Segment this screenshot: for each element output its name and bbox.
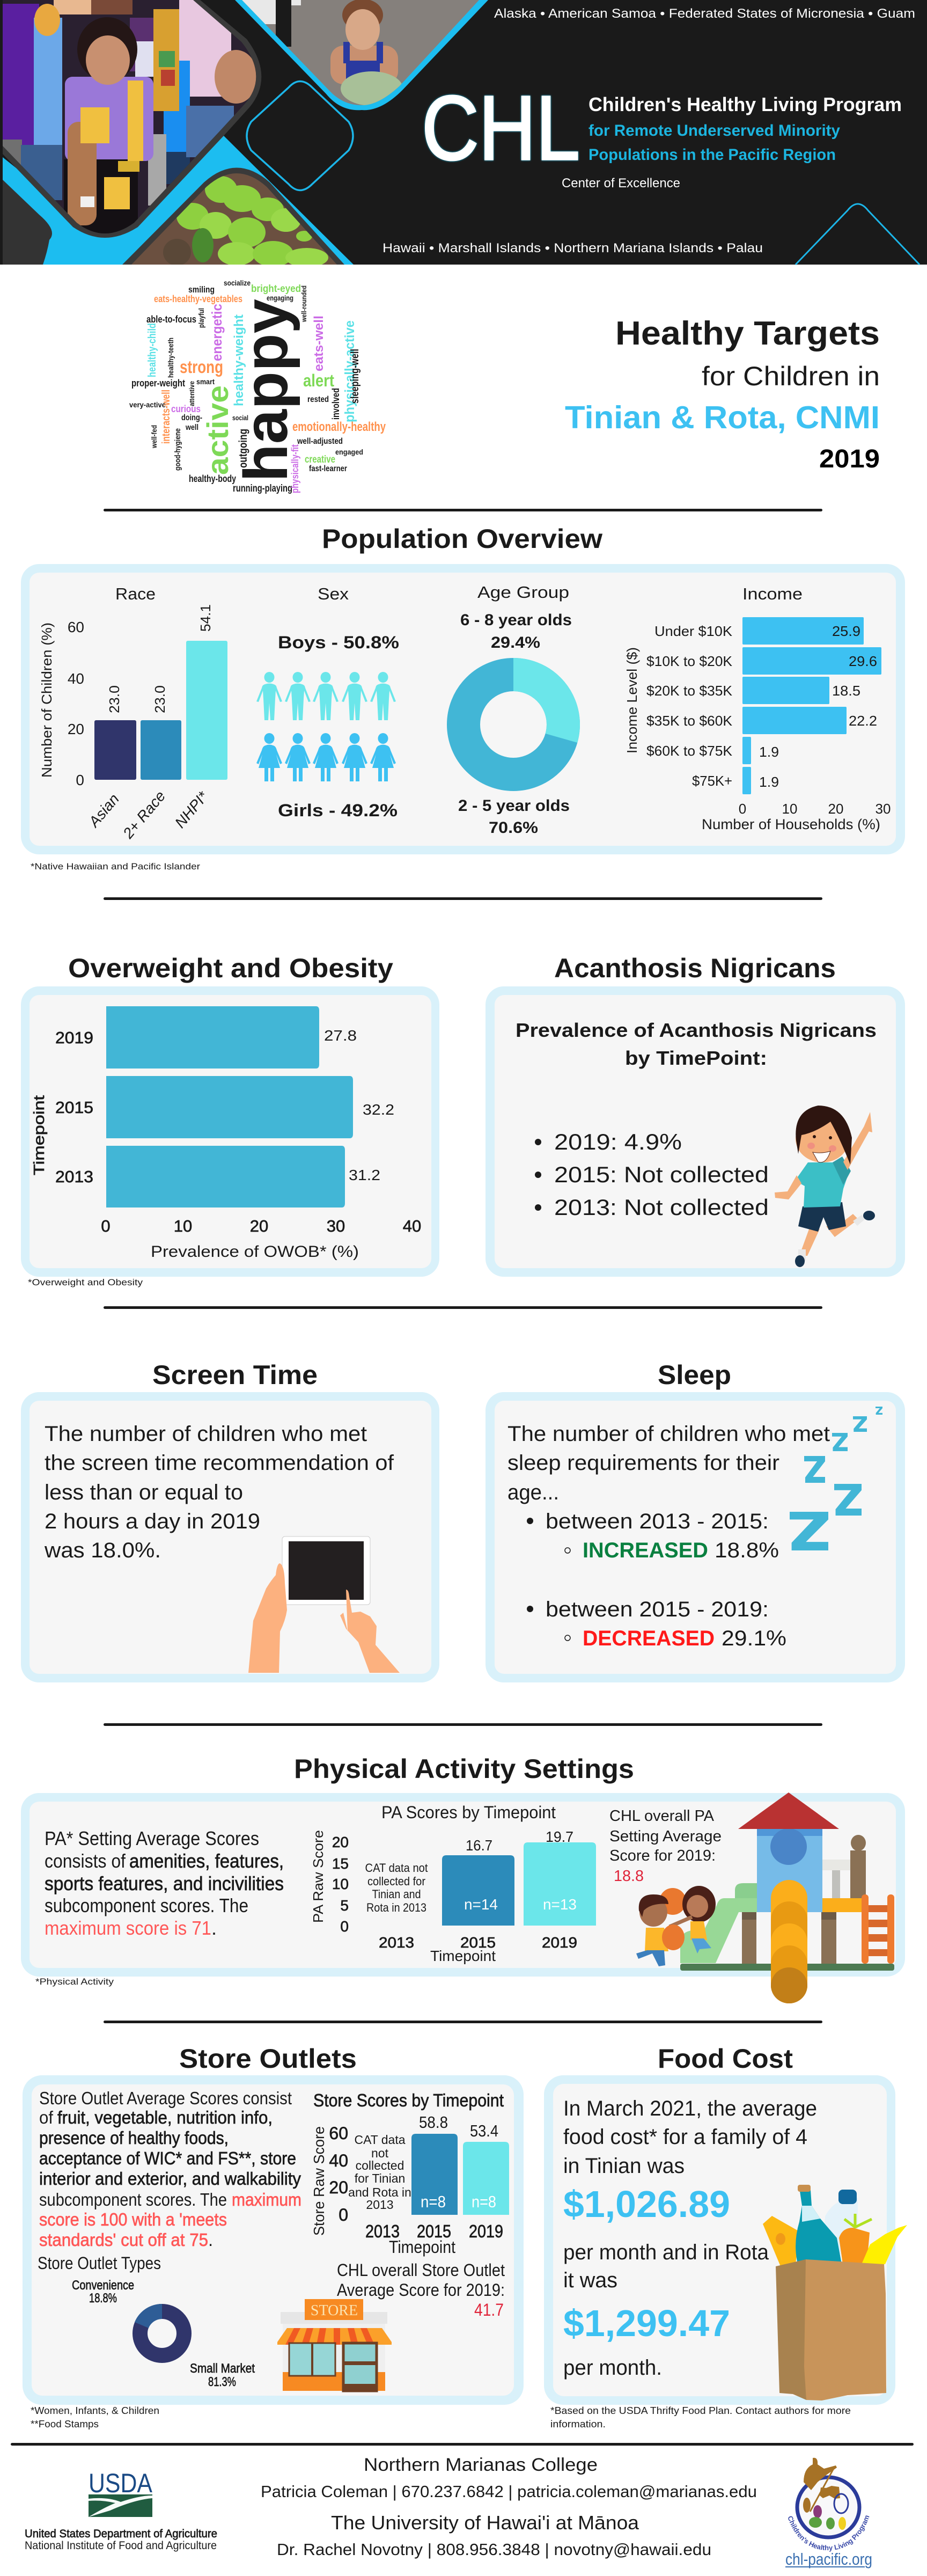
word cloud: involved — [330, 388, 341, 420]
chart: race: 23.0 — [152, 685, 168, 713]
bar chart: PA scores by timepoint: Timepoint — [430, 1948, 496, 1964]
bar chart: PA scores by timepoint: PA Scores by Timepoint — [381, 1803, 556, 1822]
bar chart: PA scores by timepoint — [310, 1803, 596, 1964]
text: store outlet description: interior and exterior, and walkability — [39, 2169, 301, 2189]
panel: store outlets — [23, 2075, 524, 2405]
word cloud: engaged — [335, 448, 363, 456]
heading: store outlets: Store Outlets — [179, 2044, 357, 2074]
link: chl-pacific.org: chl-pacific.org — [785, 2550, 872, 2568]
bar chart: income: $20K to $35K — [646, 683, 733, 699]
panel: physical activity settings — [21, 1792, 905, 2003]
text: screen time recommendation — [44, 1422, 394, 1562]
title year: 2019 — [819, 445, 880, 473]
bar chart: PA scores by timepoint: 2013 — [379, 1934, 414, 1951]
panel: sleep — [485, 1392, 905, 1682]
bar chart: income: $75K+ — [692, 773, 732, 789]
bar chart: income: 1.9 — [759, 774, 779, 790]
text: store outlet description: standards' cut off at 75 — [39, 2230, 208, 2250]
footnote: food cost: information. — [550, 2419, 606, 2429]
text: store outlet description: maximum — [232, 2190, 301, 2209]
word cloud: strong — [180, 357, 223, 377]
text: store outlet description: fruit, vegetable, nutrition info, — [57, 2107, 273, 2127]
program name: Children's Healthy Living Program — [588, 93, 902, 115]
word cloud: able-to-focus — [146, 314, 196, 325]
text: store outlet description: . — [208, 2230, 213, 2250]
heading: physical activity settings: Physical Activity Settings — [294, 1754, 634, 1784]
text: food cost intro — [563, 2097, 817, 2178]
bar chart: store scores by timepoint: for Tinian — [355, 2171, 405, 2185]
text: PA description: maximum score is 71 — [45, 1917, 211, 1939]
callout: CHL overall PA score: Score for 2019: — [609, 1847, 716, 1864]
text: sleep requirements: The number of children who met — [507, 1422, 830, 1446]
text: food cost middle: per month and in Rota — [563, 2241, 769, 2264]
bar chart: store scores by timepoint: 0 — [339, 2205, 348, 2224]
word cloud: well-fed — [150, 425, 158, 449]
heading: acanthosis nigricans: Acanthosis Nigricans — [554, 953, 836, 983]
word cloud: sleeping-well — [349, 349, 361, 404]
bar chart: PA scores by timepoint: n=13 — [543, 1896, 577, 1913]
heading: food cost: Food Cost — [658, 2044, 793, 2074]
word cloud: doing- — [181, 413, 202, 422]
bar chart: income: 18.5 — [832, 683, 860, 699]
footnotes: store outlets: **Food Stamps — [31, 2419, 99, 2429]
word cloud: running-playing — [233, 483, 292, 494]
bar chart: store scores by timepoint: 2015 — [417, 2221, 451, 2241]
text: PA description: subcomponent scores. The — [45, 1894, 248, 1916]
heading: population overview: Population Overview — [322, 524, 602, 554]
word cloud: good-hygiene — [173, 428, 182, 471]
bar chart: income: $10K to $20K — [646, 653, 733, 669]
footnotes: store outlets: *Women, Infants, & Children — [31, 2405, 159, 2416]
chart: race: 40 — [68, 670, 84, 687]
donut chart: store outlet types: Small Market — [190, 2361, 255, 2376]
text: food cost middle — [563, 2241, 769, 2292]
icon: storefront — [277, 2299, 392, 2391]
text: store outlet description: score is 100 with a 'meets — [39, 2209, 227, 2229]
bar chart: income: 10 — [782, 801, 797, 817]
bullet list: AN values: 2019: 4.9% — [554, 1129, 682, 1154]
text: screen time recommendation: less than or equal to — [45, 1481, 243, 1504]
text: screen time recommendation: 2 hours a day in 2019 — [45, 1510, 260, 1533]
bar chart: OWOB prevalence: 2013 — [55, 1167, 93, 1186]
icon: children with basketballs — [636, 1886, 716, 1966]
text: sleep requirements: between 2013 - 2015: — [546, 1510, 769, 1533]
bar chart: OWOB prevalence: 20 — [250, 1217, 268, 1235]
word cloud: alert — [303, 371, 334, 390]
text: food cost intro: In March 2021, the average — [563, 2097, 817, 2120]
program tagline line 1: for Remote Underserved Minority — [588, 122, 840, 140]
icon: hands holding tablet — [248, 1536, 400, 1673]
text: sleep requirements — [507, 1422, 830, 1650]
word cloud: attentive — [188, 381, 196, 406]
text: sleep requirements: DECREASED — [583, 1627, 715, 1650]
bar chart: income: Income Level ($) — [624, 647, 640, 753]
text: screen time recommendation: was 18.0%. — [44, 1539, 161, 1562]
bar chart: OWOB prevalence: 32.2 — [363, 1101, 394, 1118]
donut chart: age group — [458, 583, 580, 837]
bar chart: OWOB prevalence: Timepoint — [31, 1095, 47, 1175]
bar chart: PA scores by timepoint: 19.7 — [546, 1828, 573, 1845]
chart: race: 2+ Race — [119, 788, 168, 842]
bar chart: store scores by timepoint: 58.8 — [419, 2113, 448, 2132]
footnotes: store outlets — [31, 2405, 159, 2429]
bar chart: store scores by timepoint: n=8 — [472, 2192, 496, 2211]
contact block: The University of Hawai'i at Mānoa — [331, 2512, 639, 2534]
text: store outlet description: of — [39, 2107, 54, 2127]
word cloud: well-adjusted — [297, 437, 343, 446]
text: sleep requirements: age... — [507, 1481, 559, 1504]
word cloud: physically-fit — [290, 444, 300, 493]
icon: grocery bag — [763, 2185, 907, 2401]
logo: USDA: National Institute of Food and Agriculture — [25, 2540, 217, 2552]
bar chart: OWOB prevalence — [31, 1006, 421, 1261]
pictogram: sex: Girls - 49.2% — [278, 801, 398, 820]
figure: Rota cost: $1,299.47 — [563, 2302, 730, 2344]
bar chart: OWOB prevalence: 2019 — [55, 1028, 93, 1047]
word cloud: eats-healthy-vegetables — [154, 294, 242, 304]
bar chart: store scores by timepoint: 40 — [329, 2151, 348, 2170]
word cloud: socialize — [224, 279, 251, 287]
bar chart: store scores by timepoint: 20 — [329, 2178, 348, 2197]
bar chart: store scores by timepoint — [311, 2090, 509, 2257]
bar chart: income: $35K to $60K — [646, 713, 733, 729]
text: PA description: amenities, features, — [129, 1850, 284, 1872]
CHL logotype: CHL — [422, 77, 580, 179]
text: sleep requirements: INCREASED — [583, 1539, 708, 1562]
text: per month: per month. — [563, 2356, 662, 2380]
text: sleep requirements: 29.1% — [722, 1627, 786, 1650]
photo: smiling toddler with bag of greens — [235, 0, 488, 113]
bar chart: income: 30 — [876, 801, 891, 817]
panel: overweight and obesity — [21, 986, 439, 1277]
photo: children with leis — [0, 0, 268, 247]
bar chart: OWOB prevalence: 31.2 — [349, 1167, 380, 1183]
bar chart: OWOB prevalence: 10 — [174, 1217, 192, 1235]
text: screen time recommendation: the screen time recommendation of — [45, 1451, 394, 1475]
bar chart: OWOB prevalence: 2015 — [55, 1098, 93, 1117]
bar chart: PA scores by timepoint: 5 — [340, 1897, 349, 1914]
logo: USDA: USDA — [89, 2468, 153, 2498]
word cloud: healthy-teeth — [166, 338, 175, 378]
word cloud: proper-weight — [131, 378, 185, 389]
decorative diamond outline — [247, 82, 353, 190]
chart: race — [39, 584, 227, 842]
word cloud: active — [201, 385, 234, 475]
logo: USDA: United States Department of Agriculture — [25, 2528, 217, 2540]
chart: race: Race — [115, 584, 156, 603]
bar chart: store scores by timepoint: Store Scores by Timepoint — [313, 2090, 504, 2110]
pictogram: sex: Sex — [318, 584, 349, 603]
word cloud: very-active — [129, 400, 166, 409]
subheading: prevalence: Prevalence of Acanthosis Nigricans — [516, 1019, 877, 1041]
word cloud: eats-well — [312, 316, 326, 371]
word cloud: healthy-child — [146, 323, 158, 377]
bar chart: OWOB prevalence: 0 — [101, 1217, 111, 1235]
bar chart: store scores by timepoint: collected — [356, 2158, 404, 2172]
bar chart: OWOB prevalence: 40 — [403, 1217, 421, 1235]
footnote: NHPI: *Native Hawaiian and Pacific Islander — [31, 861, 200, 872]
word cloud: engaging — [267, 294, 293, 302]
icon: running boy — [775, 1106, 875, 1267]
callout: CHL overall store score — [337, 2260, 505, 2319]
donut chart: age group: 70.6% — [489, 819, 538, 837]
bar chart: income: 1.9 — [759, 744, 779, 760]
bar chart: store scores by timepoint: CAT data — [354, 2133, 406, 2147]
bar chart: store scores by timepoint: Store Raw Score — [311, 2126, 327, 2236]
panel: population overview — [21, 564, 905, 854]
word cloud: social — [232, 414, 248, 422]
chart: race: Number of Children (%) — [39, 623, 55, 778]
bar chart: PA scores by timepoint: n=14 — [464, 1896, 498, 1913]
bar chart: OWOB prevalence: Prevalence of OWOB* (%) — [151, 1243, 359, 1261]
donut chart: age group: 6 - 8 year olds — [460, 611, 572, 629]
footnote: OWOB: *Overweight and Obesity — [28, 1277, 143, 1287]
bar chart: store scores by timepoint: 2019 — [469, 2221, 503, 2241]
text: store outlet description: Store Outlet Average Scores consist — [39, 2088, 292, 2108]
text: food cost intro: in Tinian was — [563, 2154, 685, 2178]
text: food cost middle: it was — [563, 2268, 617, 2292]
text: PA description: consists of — [45, 1850, 126, 1872]
program tagline line 2: Populations in the Pacific Region — [588, 146, 836, 164]
chart: race: 60 — [68, 619, 84, 635]
logo: CHL program: Children's Healthy Living Program — [788, 2515, 869, 2552]
icon row: girls — [256, 733, 396, 781]
donut chart: age group: 29.4% — [491, 634, 540, 652]
bar chart: store scores by timepoint: 60 — [329, 2124, 348, 2143]
bar chart: income: $60K to $75K — [646, 743, 733, 759]
panel: food cost — [544, 2075, 907, 2405]
bar chart: PA scores by timepoint: 0 — [340, 1918, 349, 1935]
bar chart: income: Under $10K — [654, 623, 733, 639]
bar chart: income: Number of Households (%) — [702, 816, 880, 832]
callout: CHL overall store score: CHL overall Store Outlet — [337, 2260, 505, 2280]
bar chart: PA scores by timepoint: 2019 — [542, 1934, 577, 1951]
bar chart: PA scores by timepoint: 16.7 — [466, 1837, 492, 1854]
word cloud: well — [185, 423, 198, 432]
title line 1: Healthy Targets — [615, 315, 880, 352]
contact block: Northern Marianas College — [364, 2455, 598, 2475]
logo: USDA — [25, 2468, 217, 2552]
contact block: Patricia Coleman | 670.237.6842 | patricia.coleman@marianas.edu — [261, 2482, 757, 2501]
callout: CHL overall PA score — [609, 1807, 722, 1885]
donut chart: age group: 2 - 5 year olds — [458, 797, 570, 815]
icon: storefront: STORE — [311, 2302, 358, 2319]
chart: race: 20 — [68, 721, 84, 737]
donut chart: store outlet types — [38, 2253, 255, 2389]
panel: acanthosis nigricans — [485, 986, 905, 1277]
bar chart: income: 0 — [739, 801, 746, 817]
chart: race: 54.1 — [197, 604, 214, 632]
donut chart: store outlet types: 18.8% — [89, 2291, 117, 2306]
subheading: prevalence — [516, 1019, 877, 1069]
callout: CHL overall store score: Average Score for 2019: — [337, 2280, 505, 2300]
text: sleep requirements: sleep requirements for their — [507, 1451, 779, 1475]
footnote: PA: *Physical Activity — [35, 1977, 114, 1987]
bar chart: income: 25.9 — [832, 623, 860, 639]
text: PA description — [45, 1827, 284, 1939]
word cloud: well-rounded — [300, 286, 308, 323]
bar chart: income: 20 — [828, 801, 843, 817]
word cloud: happy — [232, 299, 300, 482]
callout: CHL overall PA score: Setting Average — [609, 1828, 722, 1845]
text: store outlet description: presence of healthy foods, — [39, 2128, 229, 2148]
decorative triangle outline — [796, 204, 919, 265]
title line 2: for Children in — [702, 361, 880, 391]
word cloud: bright-eyed — [251, 283, 301, 295]
text: food cost intro: food cost* for a family of 4 — [563, 2125, 807, 2149]
donut chart: age group: Age Group — [477, 583, 569, 602]
word cloud: energetic — [209, 304, 225, 361]
word cloud: interacts-well — [160, 390, 172, 444]
footnote: food cost: *Based on the USDA Thrifty Food Plan. Contact authors for more — [550, 2405, 851, 2416]
contact block — [261, 2455, 757, 2559]
title location: Tinian & Rota, CNMI — [565, 400, 880, 435]
bar chart: store scores by timepoint: not — [371, 2146, 389, 2160]
subheading: prevalence: by TimePoint: — [625, 1047, 767, 1069]
footnote: food cost — [550, 2405, 851, 2429]
callout: CHL overall PA score: CHL overall PA — [609, 1807, 715, 1825]
icon: sleeping Zs — [790, 1407, 882, 1550]
bar chart: PA scores by timepoint: 20 — [332, 1834, 349, 1850]
bar chart: OWOB prevalence: 27.8 — [324, 1027, 357, 1044]
word cloud: smiling — [188, 284, 215, 295]
icon: playground — [680, 1792, 894, 2003]
header cyan and gray shapes — [3, 136, 354, 265]
word cloud: smart — [196, 377, 215, 386]
bar chart: store scores by timepoint: Timepoint — [389, 2237, 455, 2257]
bar chart: store scores by timepoint: and Rota in — [348, 2185, 411, 2199]
icon row: boys — [256, 672, 396, 720]
text: store outlet description — [39, 2088, 301, 2250]
chart: race: NHPI* — [172, 788, 211, 831]
chart: race: Asian — [85, 791, 122, 831]
chart: race: 0 — [76, 772, 84, 788]
bar chart: store scores by timepoint: 2013 — [366, 2198, 394, 2212]
bar chart: PA scores by timepoint: 10 — [332, 1876, 349, 1892]
bar chart: income: 22.2 — [849, 713, 877, 729]
bar chart: income: 29.6 — [849, 653, 877, 669]
text: PA description: sports features, and incivilities — [45, 1872, 284, 1894]
heading: sleep: Sleep — [658, 1360, 731, 1390]
header state list bottom: Hawaii • Marshall Islands • Northern Mariana Islands • Palau — [382, 241, 763, 255]
photo: lettuce garden — [122, 166, 349, 268]
bar chart: store scores by timepoint: 53.4 — [470, 2121, 498, 2140]
text: sleep requirements: between 2015 - 2019: — [546, 1598, 769, 1621]
bar chart: PA scores by timepoint: 2015 — [460, 1934, 496, 1951]
figure: Tinian cost: $1,026.89 — [563, 2183, 730, 2225]
text: store outlet description: subcomponent scores. The — [39, 2190, 227, 2209]
callout: CHL overall store score: 41.7 — [474, 2300, 504, 2319]
bar chart: PA scores by timepoint: PA Raw Score — [310, 1830, 326, 1923]
word cloud — [129, 279, 386, 494]
donut chart: store outlet types: Store Outlet Types — [38, 2253, 161, 2273]
bullet list: AN values: 2015: Not collected — [554, 1162, 769, 1187]
bar chart: OWOB prevalence: 30 — [327, 1217, 345, 1235]
header state list top: Alaska • American Samoa • Federated States of Micronesia • Guam — [494, 6, 915, 21]
logo: CHL program — [788, 2458, 869, 2552]
word cloud: fast-learner — [309, 464, 347, 473]
word cloud: physically-active — [342, 320, 357, 422]
text: screen time recommendation: The number of children who met — [45, 1422, 367, 1446]
word cloud: curious — [171, 404, 201, 414]
word cloud: rested — [307, 395, 329, 404]
word cloud: healthy-body — [189, 473, 236, 484]
contact block: Dr. Rachel Novotny | 808.956.3848 | novotny@hawaii.edu — [277, 2540, 711, 2559]
bar chart: PA scores by timepoint: collected for — [367, 1875, 425, 1888]
word cloud: emotionally-healthy — [292, 420, 386, 434]
bar chart: income: Income — [742, 584, 803, 603]
bar chart: income — [624, 584, 891, 832]
text: sleep requirements: 18.8% — [715, 1539, 779, 1562]
pictogram: sex — [256, 584, 399, 820]
main title — [565, 315, 880, 473]
word cloud: outgoing — [237, 429, 249, 468]
donut chart: store outlet types: 81.3% — [208, 2375, 236, 2389]
bar chart: PA scores by timepoint: CAT data not — [365, 1861, 428, 1875]
bar chart: PA scores by timepoint: 15 — [332, 1855, 349, 1872]
panel: screen time — [21, 1392, 439, 1682]
text: PA description: PA* Setting Average Scores — [45, 1827, 259, 1849]
bar chart: PA scores by timepoint: Tinian and — [372, 1887, 421, 1901]
center of excellence: Center of Excellence — [562, 176, 680, 191]
word cloud: creative — [305, 454, 335, 465]
bar chart: store scores by timepoint: n=8 — [421, 2192, 446, 2211]
heading: overweight and obesity: Overweight and Obesity — [68, 953, 393, 983]
bullet list: AN values: 2013: Not collected — [554, 1195, 769, 1220]
donut chart: store outlet types: Convenience — [72, 2278, 134, 2293]
word cloud: healthy-weight — [232, 314, 246, 406]
text: PA description: . — [211, 1917, 217, 1939]
word cloud: playful — [197, 308, 205, 328]
pictogram: sex: Boys - 50.8% — [278, 633, 399, 652]
header banner — [0, 0, 927, 268]
text: store outlet description: acceptance of WIC* and FS**, store — [39, 2148, 296, 2168]
callout: CHL overall PA score: 18.8 — [614, 1868, 644, 1885]
bar chart: store scores by timepoint: 2013 — [365, 2221, 400, 2241]
bar chart: PA scores by timepoint: Rota in 2013 — [366, 1901, 426, 1914]
bullet list: AN values — [535, 1129, 769, 1220]
heading: screen time: Screen Time — [152, 1360, 318, 1390]
chart: race: 23.0 — [106, 685, 122, 713]
